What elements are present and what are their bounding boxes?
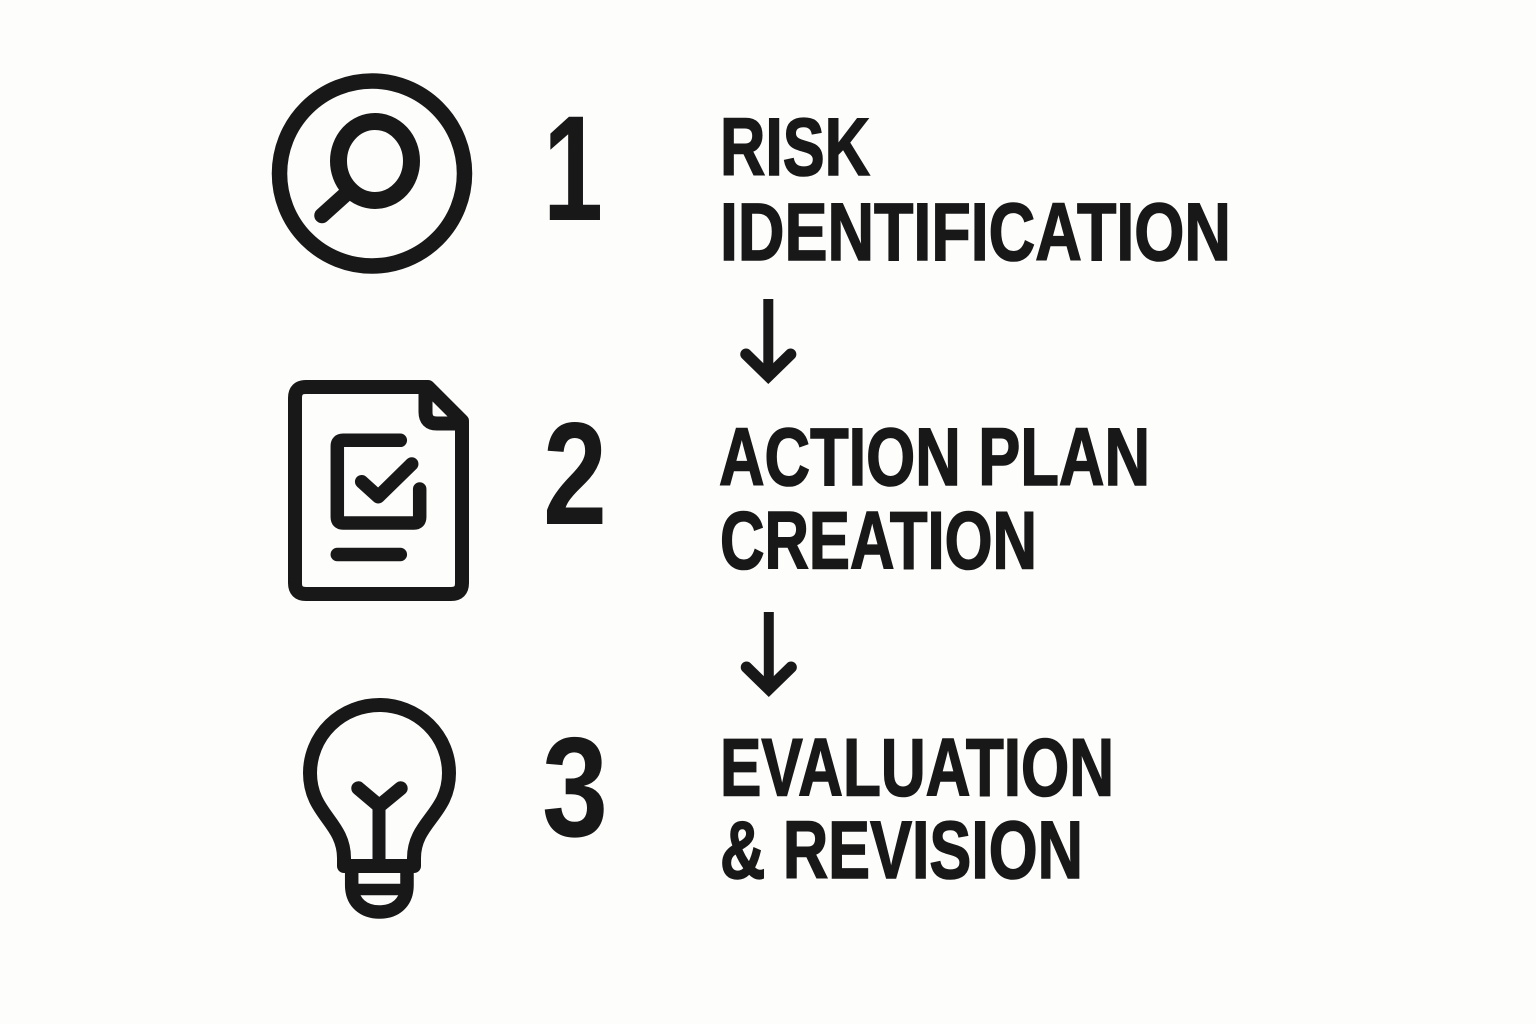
icon: document with checkbox	[295, 387, 462, 594]
icon: light bulb	[310, 705, 449, 912]
heading: risk identification: IDENTIFICATION	[720, 187, 1231, 278]
heading: evaluation and revision: EVALUATION	[720, 722, 1114, 814]
step 1: risk identification	[280, 81, 1231, 278]
arrow: step 2 to 3	[746, 612, 791, 691]
number 1: 1	[543, 84, 603, 252]
icon: magnifying glass in circle	[280, 81, 464, 266]
arrow: step 1 to 2	[746, 299, 791, 378]
number 3: 3	[542, 708, 608, 867]
heading: risk identification: RISK	[720, 102, 870, 193]
heading: action plan creation: ACTION PLAN	[719, 412, 1150, 503]
step 2: action plan creation	[295, 387, 1150, 594]
heading: action plan creation: CREATION	[720, 496, 1037, 586]
step 3: evaluation and revision	[310, 705, 1114, 912]
number 2: 2	[543, 392, 607, 555]
heading: evaluation and revision: & REVISION	[720, 805, 1083, 896]
